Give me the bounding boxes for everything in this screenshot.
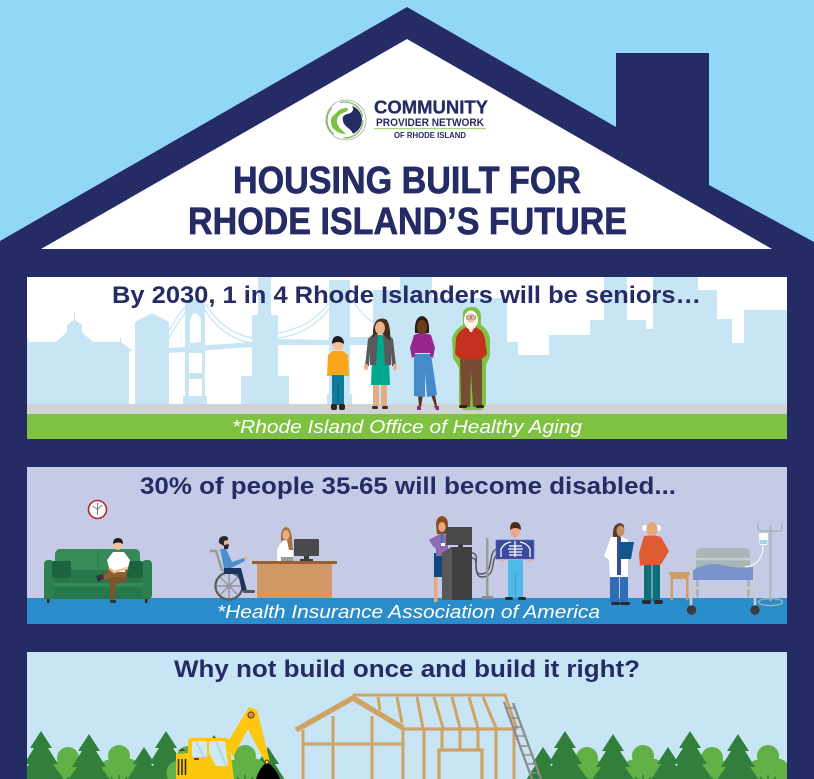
patient with chest x-ray (496, 522, 534, 600)
panel: build it right (13, 652, 790, 779)
sidewalk (27, 404, 787, 414)
excavator (176, 707, 280, 779)
ladder (504, 702, 541, 779)
bridge openings (189, 313, 202, 396)
side table (669, 572, 690, 600)
figure: boy (327, 336, 349, 410)
heading: Why not build once and build it right? (174, 656, 640, 683)
doctor with clipboard (604, 523, 634, 605)
elderly patient (639, 522, 669, 604)
house frame under construction (296, 695, 517, 779)
x-ray hoses and stand (472, 538, 499, 599)
title: HOUSING BUILT FOR (233, 160, 581, 202)
caption: *Rhode Island Office of Healthy Aging (232, 417, 582, 437)
figure: senior man highlighted in green (452, 307, 490, 410)
logo wordmark: COMMUNITY (374, 98, 488, 118)
green caption band (27, 414, 787, 439)
blue caption band (27, 598, 787, 624)
trees left (13, 731, 296, 779)
logo: Community Provider Network of Rhode Island: PROVIDER NETWORK (376, 117, 484, 129)
caption: *Health Insurance Association of America (217, 602, 600, 622)
technician at x-ray machine (429, 516, 472, 602)
heading: 30% of people 35-65 will become disabled... (140, 473, 676, 500)
receptionist at desk (277, 527, 319, 561)
reception desk (252, 561, 337, 598)
panel: seniors statistic (27, 277, 787, 439)
roof gable panel (41, 39, 772, 249)
icon: wall clock (88, 500, 106, 518)
figure: woman in purple (410, 316, 439, 410)
title: RHODE ISLAND’S FUTURE (188, 201, 627, 243)
logo icon (326, 100, 366, 140)
IV stand (745, 523, 782, 606)
title (188, 160, 627, 243)
hospital bed (687, 548, 760, 615)
green sofa (44, 549, 152, 603)
man in wheelchair (210, 536, 255, 600)
panel: disability statistic (27, 467, 787, 624)
logo: Community Provider Network of Rhode Island: OF RHODE ISLAND (394, 131, 466, 140)
city skyline and bridge (27, 277, 787, 404)
logo: Community Provider Network of Rhode Island (326, 98, 488, 140)
man sitting on sofa (96, 538, 130, 603)
figure: woman in jacket (364, 318, 397, 409)
heading: By 2030, 1 in 4 Rhode Islanders will be seniors… (112, 282, 701, 309)
trees right (515, 731, 790, 779)
